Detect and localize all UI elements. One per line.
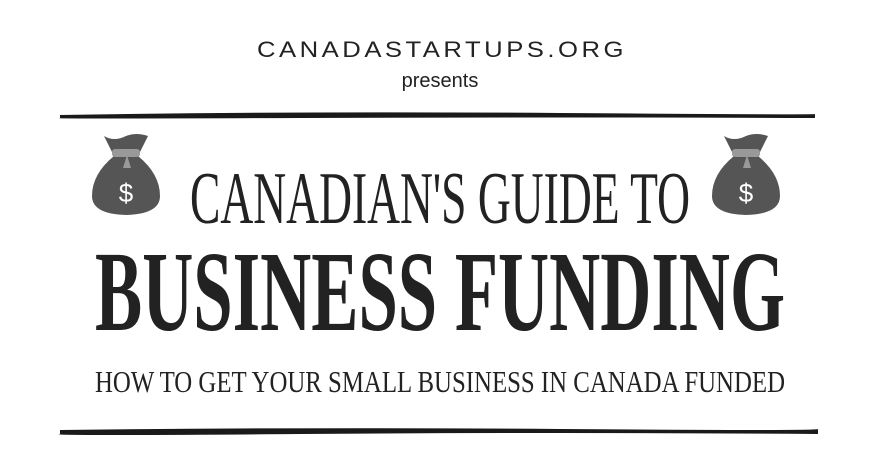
site name: CANADASTARTUPS.ORG <box>257 37 627 62</box>
icon: money bag left: $ <box>119 178 134 208</box>
presents: presents <box>402 70 478 92</box>
top rule <box>59 112 815 118</box>
icon: money bag left <box>92 134 160 215</box>
icon: money bag right: $ <box>739 178 754 208</box>
icon: money bag right <box>712 134 780 215</box>
bottom rule <box>59 428 818 435</box>
